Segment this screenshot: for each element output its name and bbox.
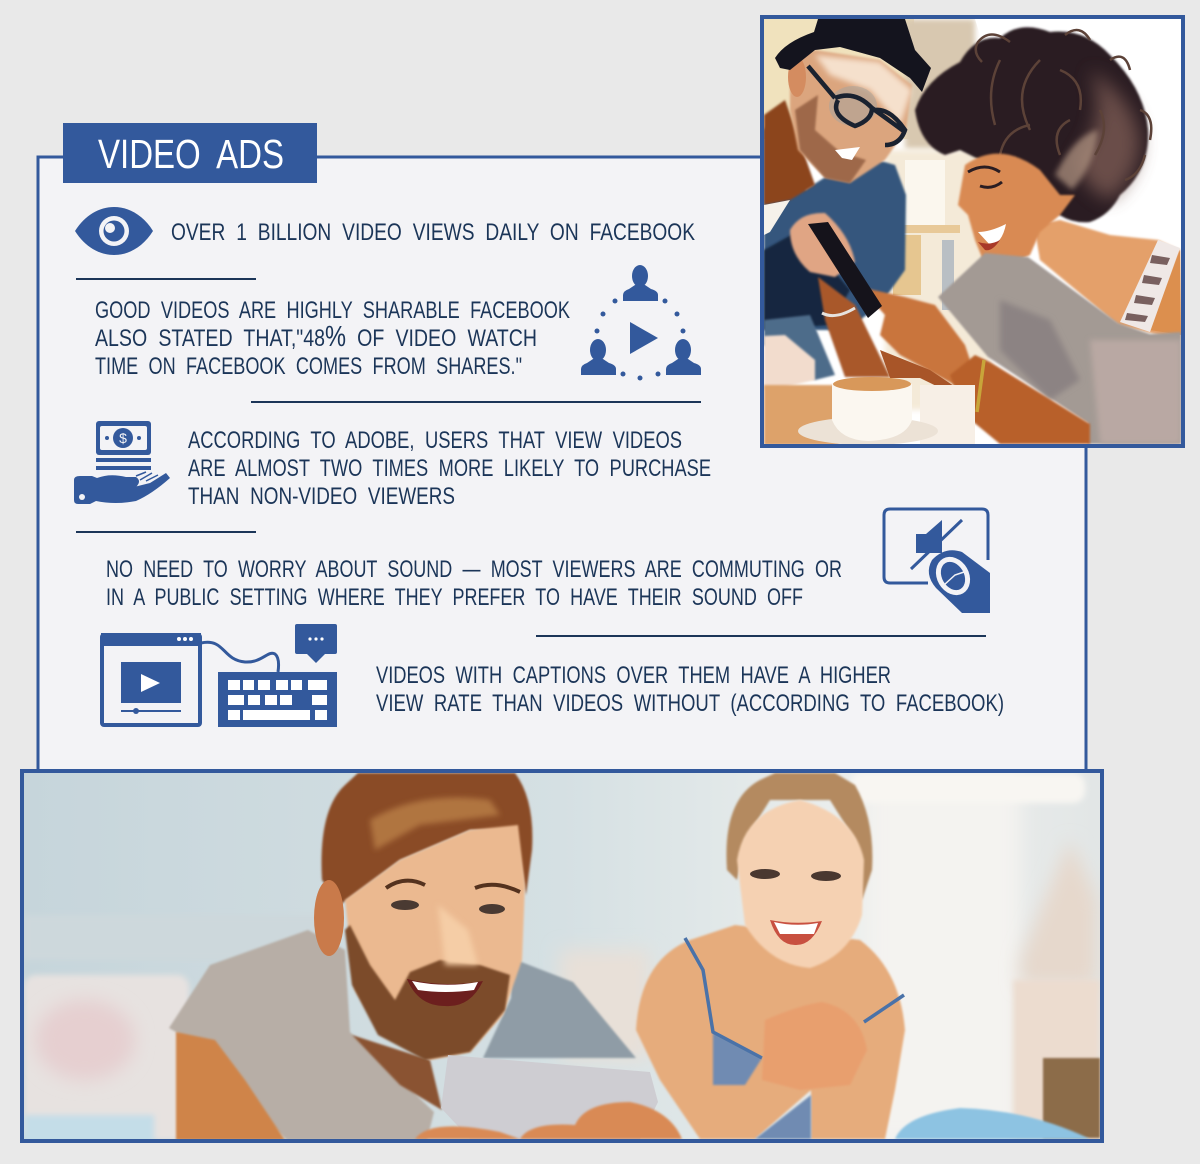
icon: video window and keyboard [101, 624, 337, 727]
text: adobe purchase [188, 427, 711, 510]
icon: shared video [581, 265, 701, 380]
icon: money in hand [74, 421, 170, 504]
icon: money in hand: $ [119, 430, 127, 446]
photo: father and daughter with phone [22, 771, 1102, 1145]
text: sharable videos: TIME ON FACEBOOK COMES FROM SHARES." [95, 353, 522, 380]
text: adobe purchase: ACCORDING TO ADOBE, USERS THAT VIEW VIDEOS [188, 427, 682, 454]
photo: couple looking at phone [762, 17, 1183, 446]
icon: eye [75, 207, 153, 255]
text: sharable videos: ALSO STATED THAT,"48% OF VIDEO WATCH [95, 321, 537, 353]
text: captions: VIEW RATE THAN VIDEOS WITHOUT (ACCORDING TO FACEBOOK) [376, 690, 1004, 717]
text: sharable videos: GOOD VIDEOS ARE HIGHLY SHARABLE FACEBOOK [95, 297, 570, 324]
text: captions: VIDEOS WITH CAPTIONS OVER THEM HAVE A HIGHER [376, 662, 891, 689]
panel: video ads [38, 123, 1086, 777]
text: billion views: OVER 1 BILLION VIDEO VIEWS DAILY ON FACEBOOK [171, 219, 695, 246]
text: sound off [106, 556, 842, 611]
text: sharable videos [95, 297, 570, 380]
icon: muted screen with finger [884, 509, 990, 613]
heading: video ads: VIDEO ADS [98, 131, 284, 177]
heading: video ads [63, 123, 317, 183]
text: adobe purchase: THAN NON-VIDEO VIEWERS [188, 483, 455, 510]
text: sound off: NO NEED TO WORRY ABOUT SOUND — MOST VIEWERS ARE COMMUTING OR [106, 556, 842, 583]
text: sound off: IN A PUBLIC SETTING WHERE THEY PREFER TO HAVE THEIR SOUND OFF [106, 584, 803, 611]
text: captions [376, 662, 1004, 717]
text: adobe purchase: ARE ALMOST TWO TIMES MORE LIKELY TO PURCHASE [188, 455, 711, 482]
